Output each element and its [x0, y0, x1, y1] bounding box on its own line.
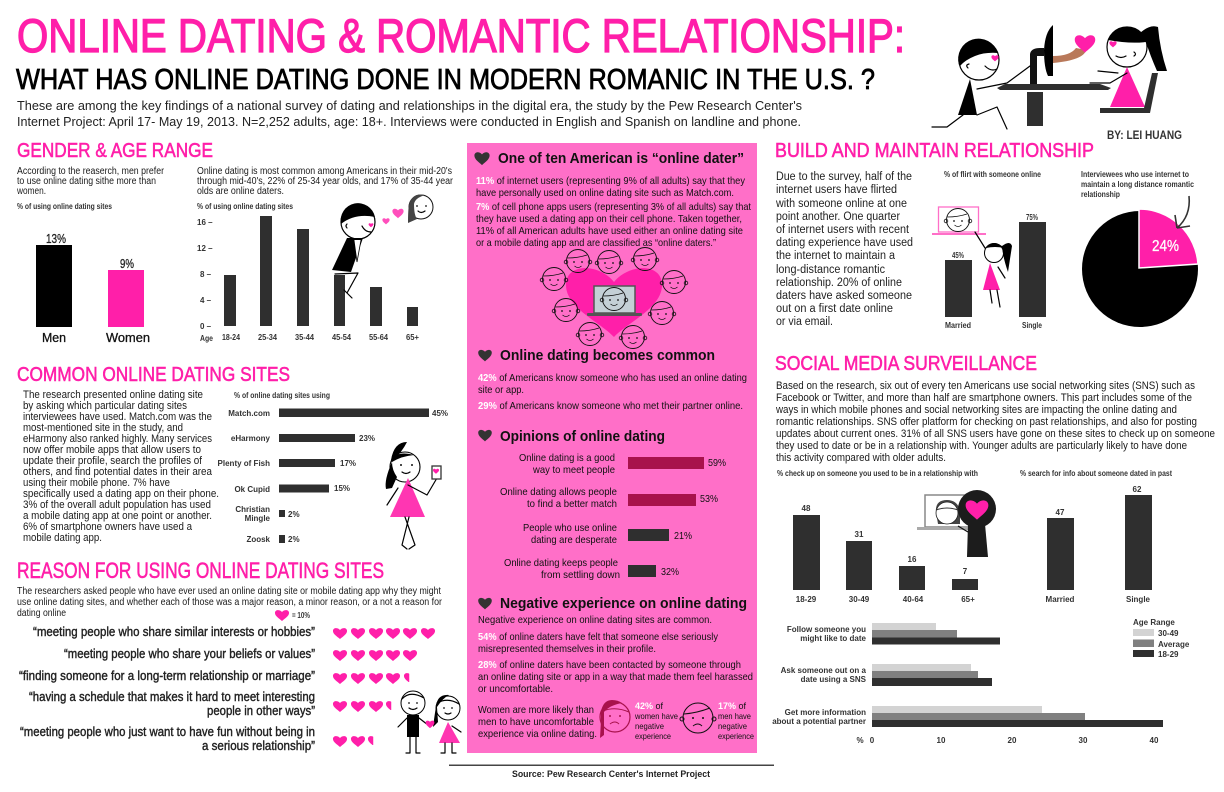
chart: check up bars by age: 18-29 [796, 595, 817, 604]
text block: reasons: dating online [17, 608, 66, 619]
chart: flirt bars [944, 170, 1046, 330]
chart: opinions bars: Online dating keeps people [504, 557, 618, 569]
text block: online dater [476, 175, 751, 249]
text block: negative: an online dating site or app in a way that made them feel harassed [478, 671, 753, 683]
text block: negative: men to have uncomfortable [478, 716, 594, 728]
chart: opinions bars: to find a better match [527, 498, 617, 510]
chart: age bars: 55-64 [369, 333, 389, 342]
text block: reasons: The researchers asked people who have ever used an online dating site or mobile dating app why they might [17, 586, 441, 597]
text block: common: 42% of Americans know someone who has used an online dating [478, 372, 747, 384]
text block: build: Due to the survey, half of the [776, 171, 912, 183]
text block: online dater: they have used a dating app on their cell phone. Taken together, [476, 213, 742, 225]
chart: grouped horizontal bars: 30 [1079, 736, 1088, 745]
text block: gender: women. [16, 186, 46, 197]
text: women percent: 42% of [635, 701, 664, 711]
chart: opinions bars: 21% [674, 530, 692, 542]
text block: online dater: have personally used on online dating site such as Match.com. [476, 187, 734, 199]
chart: age bars [197, 202, 419, 343]
legend: heart equals ten percent: = 10% [292, 611, 310, 620]
chart: flirt bars: Married [945, 321, 971, 330]
quote 5 [20, 724, 315, 753]
text block: build: of internet users with recent [776, 224, 910, 236]
legend: heart equals ten percent [275, 610, 310, 621]
text block: sites: 6% of smartphone owners have used a [23, 521, 193, 533]
chart: flirt bars: % of flirt with someone online [944, 170, 1041, 179]
heading: gender: GENDER & AGE RANGE [17, 140, 213, 162]
illustration: couple holding heart [398, 691, 461, 753]
text block: surveillance: ways in which mobile phones and social networking sites are impacting the online dating and [775, 404, 1177, 416]
legend: age range: 18-29 [1158, 650, 1179, 659]
chart: age bars: 0 – [200, 322, 212, 331]
chart: dating site usage: 17% [340, 459, 356, 468]
panel: social media surveillance [772, 353, 1215, 745]
chart: search info bars [1020, 469, 1172, 604]
chart: opinions bars: 32% [661, 566, 679, 578]
text block: gender: to use online dating sithe more than [17, 176, 156, 187]
chart: search info bars: 47 [1056, 508, 1065, 517]
chart: grouped horizontal bars: about a potential partner [772, 717, 866, 726]
legend: age range: 30-49 [1158, 629, 1179, 638]
chart: dating site usage: Zoosk [246, 535, 271, 544]
chart: grouped horizontal bars: 20 [1008, 736, 1017, 745]
illustration: woman holding phone [386, 442, 441, 549]
chart: gender bars: Women [106, 330, 150, 345]
byline: BY: LEI HUANG [1107, 128, 1182, 142]
text block: sites: update their profile, search the profiles of [23, 455, 203, 467]
chart: dating site usage: Plenty of Fish [218, 459, 270, 468]
section: negative experience [478, 595, 754, 741]
illustration: heart with laptop and faces [540, 248, 688, 348]
chart: check up bars by age: 30-49 [849, 595, 870, 604]
chart: long distance pie: maintain a long distance romantic [1081, 180, 1194, 189]
chart: grouped horizontal bars: might like to date [800, 634, 867, 643]
panel: reasons for using online dating sites [17, 558, 461, 753]
chart: gender bars [17, 202, 150, 345]
text block: online dater: or a mobile dating app and are classified as “online daters.” [476, 237, 716, 249]
chart: opinions bars: Online dating allows people [500, 486, 617, 498]
text block: age [197, 166, 454, 197]
text block: age: Online dating is most common among Americans in their mid-20's [197, 166, 452, 177]
text block: build: internet users have flirted [776, 184, 897, 196]
intro text [17, 99, 802, 129]
chart: age bars: 4 – [200, 296, 212, 305]
panel: central pink column [467, 143, 757, 753]
text block: build: out on a first date online [776, 303, 893, 315]
text block: surveillance [775, 380, 1215, 464]
text block: reasons: use online dating sites, and whether each of those was a major reason, a minor reason, or a not a reason for [17, 597, 443, 608]
heading: build: BUILD AND MAINTAIN RELATIONSHIP [775, 140, 1094, 162]
chart: grouped horizontal bars: 0 [870, 736, 875, 745]
heading: opinions: Opinions of online dating [500, 428, 665, 445]
chart: gender bars: 13% [46, 231, 66, 246]
heading: sites: COMMON ONLINE DATING SITES [17, 364, 290, 386]
quote 1: “meeting people who share similar interests or hobbies” [33, 624, 315, 639]
chart: dating site usage: 2% [288, 510, 300, 519]
text block: age: through mid-40's, 22% of 25-34 year olds, and 17% of 35-44 year [197, 176, 454, 187]
legend: age range [1133, 618, 1190, 659]
text: women percent: negative [635, 721, 664, 731]
text block: sites: mobile dating app. [23, 532, 102, 544]
text block: build: relationship. 20% of online [776, 277, 902, 289]
chart: age bars: 16 – [197, 218, 213, 227]
text block: common: site or app. [478, 384, 524, 396]
chart: grouped horizontal bars: Ask someone out on a [781, 666, 867, 675]
chart: grouped horizontal bars: date using a SNS [801, 675, 867, 684]
intro text: These are among the key findings of a national survey of dating and relationships in the digital era, the study by the Pew Research Center's [17, 99, 802, 113]
source: Source: Pew Research Center's Internet Project [512, 769, 710, 779]
chart: check up bars by age: % check up on someone you used to be in a relationship with [777, 469, 978, 478]
chart: check up bars by age: 31 [855, 530, 864, 539]
chart: opinions bars: way to meet people [532, 464, 615, 476]
chart: dating site usage: 23% [359, 434, 375, 443]
chart: dating site usage: 45% [432, 409, 448, 418]
chart: opinions bars [500, 452, 726, 581]
text block: sites: interviewees have used. Match.com was the [23, 411, 212, 423]
chart: age bars: 18-24 [222, 333, 240, 342]
text block: build: long-distance romantic [776, 264, 885, 276]
subtitle: WHAT HAS ONLINE DATING DONE IN MODERN ROMANIC IN THE U.S. ? [16, 64, 875, 96]
heading: reasons: REASON FOR USING ONLINE DATING SITES [17, 558, 384, 583]
text block: build: the internet to maintain a [776, 250, 896, 262]
icon: sad woman [600, 700, 630, 738]
section: opinions [478, 428, 726, 581]
chart: long distance pie: relationship [1081, 190, 1120, 199]
illustration: magnifier over laptop profile [917, 490, 996, 557]
text block: sites [23, 389, 219, 544]
text block: build: daters have asked someone [776, 290, 912, 302]
text block: sites: 3% of the overall adult population has used [23, 499, 211, 511]
quote 4 [29, 689, 315, 718]
text block: negative: Negative experience on online dating sites are common. [478, 614, 712, 626]
chart: gender bars: 9% [120, 256, 134, 271]
chart: flirt bars: Single [1022, 321, 1042, 330]
text block: online dater: 7% of cell phone apps users (representing 3% of all adults) say that [476, 201, 751, 213]
chart: grouped horizontal bars: 10 [937, 736, 946, 745]
chart: search info bars: 62 [1133, 485, 1142, 494]
chart: search info bars: Single [1126, 595, 1151, 604]
icon: heart [474, 152, 490, 165]
text block: sites: others, and find potential dates in their area [23, 466, 213, 478]
quote 5: “meeting people who just want to have fun without being in [20, 724, 315, 739]
chart: check up bars by age [777, 469, 978, 604]
text block: online dater: 11% of all American adults have used either an online dating site [476, 225, 743, 237]
text block: negative [478, 614, 753, 740]
text: men percent: 17% of [718, 701, 747, 711]
chart: opinions bars: 53% [700, 493, 718, 505]
text block: age: olds are online daters. [197, 186, 284, 197]
chart: dating site usage: 2% [288, 535, 300, 544]
section: becoming common [478, 347, 747, 412]
chart: check up bars by age: 7 [963, 567, 968, 576]
chart: dating site usage: Match.com [228, 409, 270, 418]
text block: sites: eHarmony also ranked highly. Many services [23, 433, 212, 445]
chart: grouped horizontal bars [772, 623, 1163, 745]
text block: negative: Women are more likely than [478, 704, 594, 716]
text: women percent: experience [635, 731, 671, 741]
text: women percent: women have [634, 711, 678, 721]
chart: grouped horizontal bars: Follow someone you [787, 625, 866, 634]
text: women percent [634, 701, 678, 741]
panel: gender and age range [16, 140, 454, 345]
text block: surveillance: this activity compared with older adults. [776, 452, 946, 464]
text: men percent [718, 701, 754, 741]
chart: age bars: % of using online dating sites [197, 202, 293, 211]
chart: grouped horizontal bars: % [856, 736, 864, 745]
chart: long distance pie [1081, 170, 1198, 327]
quote 4: people in other ways” [207, 703, 315, 718]
chart: flirt bars: 45% [952, 251, 964, 260]
text block: negative: misrepresented themselves in their profile. [478, 643, 656, 655]
chart: age bars: 65+ [406, 333, 419, 342]
chart: dating site usage [218, 391, 448, 544]
chart: gender bars: % of using online dating sites [17, 202, 112, 211]
text block: build: point another. One quarter [776, 211, 900, 223]
text block: common [478, 372, 747, 412]
heart rows [333, 628, 435, 747]
text block: sites: The research presented online dating site [23, 389, 203, 401]
quote 3: “finding someone for a long-term relationship or marriage” [19, 668, 315, 683]
text block: sites: a mobile dating app at one point or another. [23, 510, 212, 522]
chart: opinions bars: dating are desperate [531, 534, 617, 546]
chart: dating site usage: Mingle [245, 514, 271, 523]
text block: sites: most-mentioned site in the study, and [23, 422, 183, 434]
legend: age range: Age Range [1133, 618, 1175, 627]
text block: build: dating experience have used [776, 237, 913, 249]
illustration: man sitting on bar looking at woman [332, 194, 433, 298]
panel: common online dating sites [17, 364, 448, 549]
chart: age bars: 8 – [200, 270, 212, 279]
chart: dating site usage: % of online dating sites using [234, 391, 330, 400]
chart: age bars: 25-34 [258, 333, 278, 342]
chart: age bars: 35-44 [295, 333, 315, 342]
chart: age bars: 45-54 [332, 333, 352, 342]
chart: grouped horizontal bars: 40 [1150, 736, 1159, 745]
chart: dating site usage: Ok Cupid [234, 485, 270, 494]
chart: dating site usage: eHarmony [231, 434, 271, 443]
icon: sad man [680, 703, 716, 733]
text: men percent: experience [718, 731, 754, 741]
quote 5: a serious relationship” [202, 738, 315, 753]
heading: online dater: One of ten American is “online dater” [498, 150, 744, 167]
text: men percent: men have [718, 711, 751, 721]
heading: common: Online dating becomes common [500, 347, 715, 364]
heading: negative: Negative experience on online dating [500, 595, 747, 612]
illustration: girl reaching pink laptop [932, 207, 1012, 307]
text block: negative: 28% of online daters have been contacted by someone through [478, 659, 741, 671]
text block: reasons [17, 586, 443, 619]
icon: heart [478, 598, 492, 609]
text: men percent: negative [718, 721, 747, 731]
section: one of ten [474, 150, 751, 348]
text block: gender: According to the reaserch, men prefer [17, 166, 165, 177]
chart: check up bars by age: 65+ [961, 595, 975, 604]
quote 2: “meeting people who share your beliefs or values” [64, 646, 315, 661]
chart: check up bars by age: 16 [908, 555, 917, 564]
text block: sites: specifically used a dating app on their phone. [23, 488, 219, 500]
text block: sites: now offer mobile apps that allow users to [23, 444, 201, 456]
text block: negative: or uncomfortable. [478, 683, 553, 695]
icon: heart [478, 350, 492, 361]
chart: age bars: Age [200, 334, 213, 343]
chart: flirt bars: 75% [1026, 213, 1038, 222]
icon: heart [478, 430, 492, 441]
text block: sites: using their mobile phone. 7% have [23, 477, 170, 489]
text block: build: with someone online at one [775, 198, 907, 210]
text block: common: 29% of Americans know someone who met their partner online. [478, 400, 743, 412]
title: ONLINE DATING & ROMANTIC RELATIONSHIP: [17, 9, 905, 62]
chart: long distance pie: 24% [1152, 238, 1179, 255]
chart: check up bars by age: 48 [802, 504, 811, 513]
text block: gender [16, 166, 165, 197]
chart: opinions bars: from settling down [541, 569, 620, 581]
text block: build [775, 171, 913, 328]
chart: gender bars: Men [42, 330, 66, 345]
text block: online dater: 11% of internet users (representing 9% of all adults) say that they [476, 175, 746, 187]
chart: dating site usage: Christian [235, 505, 270, 514]
text block: build: or via email. [776, 316, 833, 328]
chart: age bars: 12 – [197, 244, 213, 253]
heading: surveillance: SOCIAL MEDIA SURVEILLANCE [775, 353, 1037, 375]
chart: opinions bars: 59% [708, 457, 726, 469]
chart: opinions bars: People who use online [523, 522, 617, 534]
text block: negative: 54% of online daters have felt that someone else seriously [478, 631, 719, 643]
text block: sites: by asking which particular dating sites [23, 400, 187, 412]
legend: age range: Average [1158, 640, 1190, 649]
chart: grouped horizontal bars: Get more information [785, 708, 866, 717]
chart: long distance pie: Interviewees who use internet to [1081, 170, 1189, 179]
quote 4: “having a schedule that makes it hard to meet interesting [29, 689, 315, 704]
chart: dating site usage: 15% [334, 484, 350, 493]
chart: search info bars: Married [1046, 595, 1075, 604]
illustration: couple connected through computers [932, 25, 1167, 129]
chart: opinions bars: Online dating is a good [519, 452, 615, 464]
intro text: Internet Project: April 17- May 19, 2013. N=2,252 adults, age: 18+. Interviews were conducted in English and Spanish on landline and phone. [17, 115, 801, 129]
chart: check up bars by age: 40-64 [903, 595, 924, 604]
panel: build and maintain relationship [775, 140, 1198, 330]
text block: negative: experience via online dating. [478, 728, 597, 740]
chart: search info bars: % search for info about someone dated in past [1020, 469, 1172, 478]
